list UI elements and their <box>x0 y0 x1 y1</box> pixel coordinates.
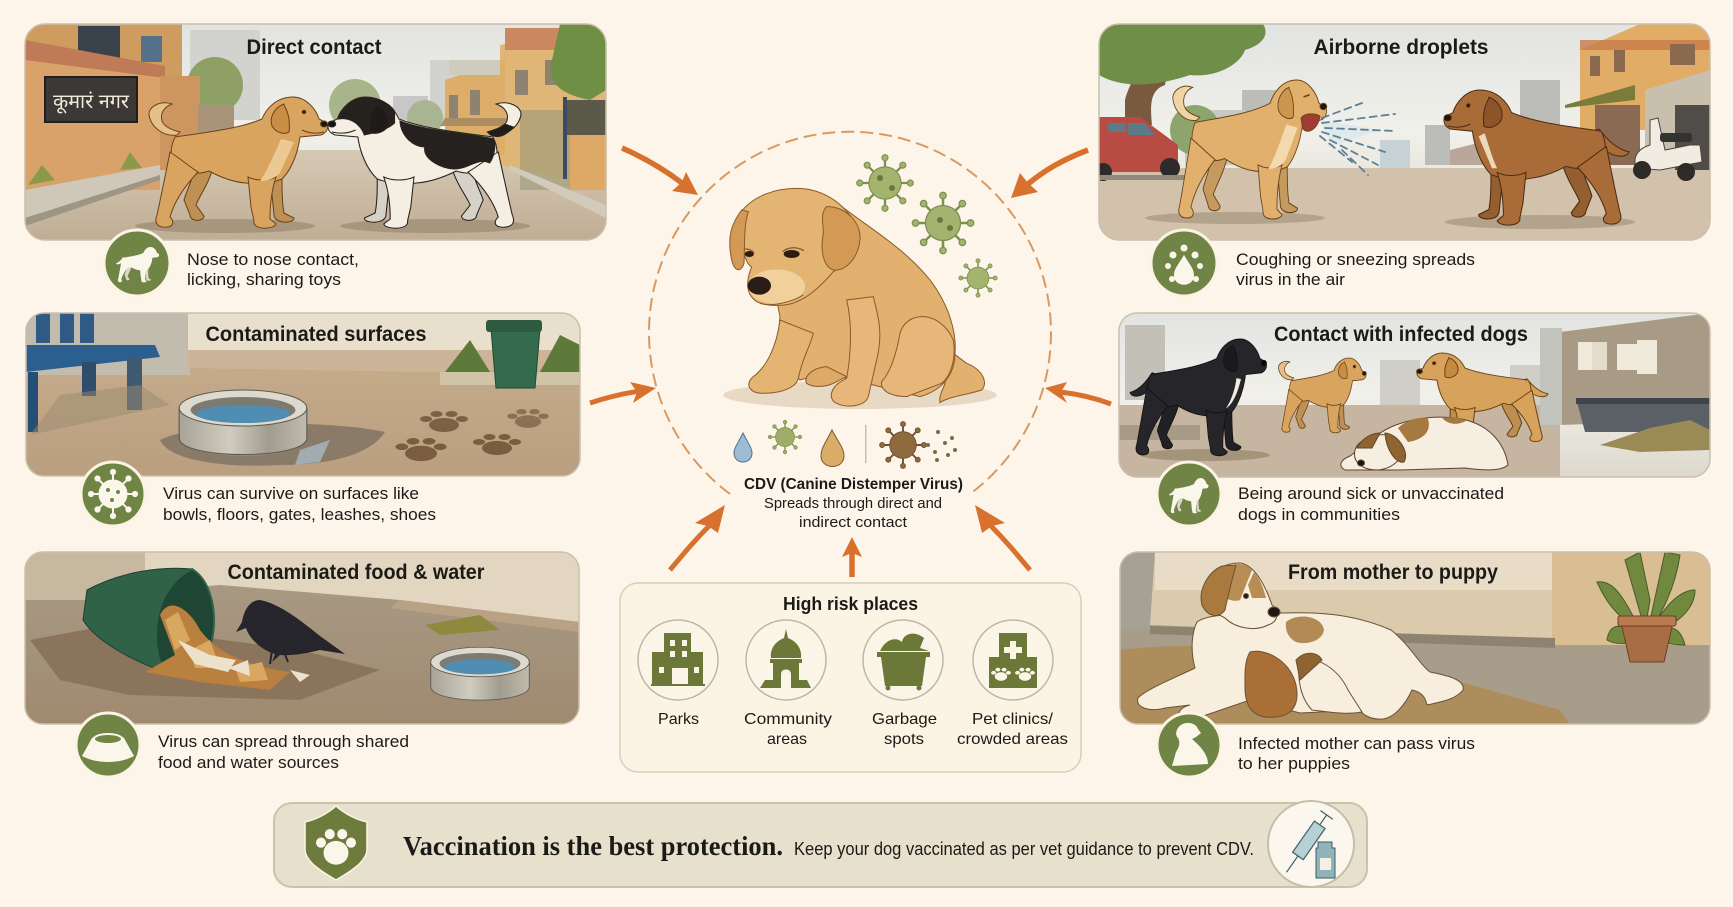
description: Coughing or sneezing spreads <box>1236 250 1475 269</box>
arrow: surfaces <box>590 382 656 403</box>
dog: mother with puppies <box>1138 563 1463 722</box>
arrow: airborne <box>1011 150 1088 198</box>
scene: coughing dog and street <box>1094 24 1710 240</box>
icon: food bowl <box>76 713 140 777</box>
description <box>187 250 359 289</box>
potted plant <box>1597 552 1695 662</box>
labels: Parks <box>658 711 699 728</box>
dog: small golden <box>1278 358 1366 433</box>
description: virus in the air <box>1236 270 1345 289</box>
center: dashed circle with puppy <box>649 132 1051 531</box>
dog: brown <box>1444 90 1629 225</box>
panel title: Contact with infected dogs <box>1274 323 1528 346</box>
panel title: Airborne droplets <box>1314 36 1488 59</box>
arrow: food and water <box>670 505 725 570</box>
panel: contact with infected dogs <box>1119 313 1710 526</box>
description: bowls, floors, gates, leashes, shoes <box>163 505 436 524</box>
garbage <box>145 606 310 690</box>
banner: vaccination <box>274 801 1367 887</box>
panel title: Contaminated surfaces <box>206 323 426 346</box>
labels: areas <box>767 731 807 748</box>
headline: Vaccination is the best protection. <box>403 831 783 861</box>
virus particles <box>857 155 997 297</box>
description: licking, sharing toys <box>187 270 341 289</box>
description <box>1238 484 1504 524</box>
dog: black <box>1130 339 1267 456</box>
caption <box>744 476 963 531</box>
icon: syringe and vial <box>1268 801 1354 887</box>
dog: golden <box>149 97 328 228</box>
icon: garbage spots <box>863 620 943 700</box>
panel title: Direct contact <box>246 36 382 59</box>
icon: parks <box>638 620 718 700</box>
dog: golden coughing <box>1173 80 1327 219</box>
labels: Community <box>744 711 832 728</box>
description <box>1236 250 1475 289</box>
description: food and water sources <box>158 753 339 772</box>
caption: indirect contact <box>799 514 908 531</box>
scene: tipped bin, crow, bowl <box>25 552 579 724</box>
description: dogs in communities <box>1238 505 1400 524</box>
scene: yard with plant <box>1120 552 1710 724</box>
icon: virus <box>81 462 145 526</box>
icon: shield with paw <box>305 806 367 880</box>
panel: high risk places <box>620 583 1081 772</box>
droplet spray <box>1320 103 1395 175</box>
caption: CDV (Canine Distemper Virus) <box>744 476 963 493</box>
icon: droplets <box>1151 230 1217 296</box>
caption: Spreads through direct and <box>764 495 942 512</box>
scene: bowl, bench, pawprints <box>26 313 580 476</box>
sign text: कूमारं नगर <box>53 91 130 114</box>
labels: Garbage <box>872 711 937 728</box>
arrow: mother to puppy <box>975 505 1030 570</box>
description <box>163 484 436 524</box>
description: Virus can survive on surfaces like <box>163 484 419 503</box>
dog: golden facing left <box>1417 353 1548 442</box>
icon: pet clinics <box>973 620 1053 700</box>
labels: crowded areas <box>957 731 1068 748</box>
description: Virus can spread through shared <box>158 732 409 751</box>
panel: contaminated surfaces <box>26 313 580 526</box>
icon: community areas <box>746 620 826 700</box>
description <box>1238 734 1475 773</box>
message: Keep your dog vaccinated as per vet guidance to prevent CDV. <box>794 839 1254 859</box>
labels <box>658 711 1068 748</box>
scene: street with wall and dumpster <box>1119 313 1710 477</box>
scene: two dogs meeting on a street <box>25 24 606 240</box>
panel: direct contact <box>25 24 606 296</box>
description: Infected mother can pass virus <box>1238 734 1475 753</box>
icon: dog <box>104 230 170 296</box>
dashed circle <box>649 132 1051 494</box>
bin <box>83 568 214 672</box>
scooter <box>1633 118 1702 181</box>
arrows <box>590 148 1111 577</box>
description <box>158 732 409 772</box>
heading: High risk places <box>783 594 918 614</box>
description: to her puppies <box>1238 754 1350 773</box>
arrow: high risk places <box>842 537 862 577</box>
icon: dog <box>1157 462 1221 526</box>
dog: lying sick <box>1341 417 1508 470</box>
panel: contaminated food and water <box>25 552 579 777</box>
panel: airborne droplets <box>1094 24 1710 296</box>
panel title: Contaminated food & water <box>228 561 484 584</box>
dog: black and white <box>328 97 521 228</box>
small icons row <box>734 420 957 468</box>
crow <box>236 600 345 664</box>
panel title: From mother to puppy <box>1288 561 1498 584</box>
icon: puppy <box>1157 713 1221 777</box>
panel: from mother to puppy <box>1120 552 1710 777</box>
sick puppy <box>723 188 997 409</box>
arrow: direct contact <box>622 148 698 195</box>
description: Being around sick or unvaccinated <box>1238 484 1504 503</box>
labels: spots <box>884 731 924 748</box>
labels: Pet clinics/ <box>972 711 1054 728</box>
description: Nose to nose contact, <box>187 250 359 269</box>
arrow: infected dogs <box>1045 382 1111 404</box>
